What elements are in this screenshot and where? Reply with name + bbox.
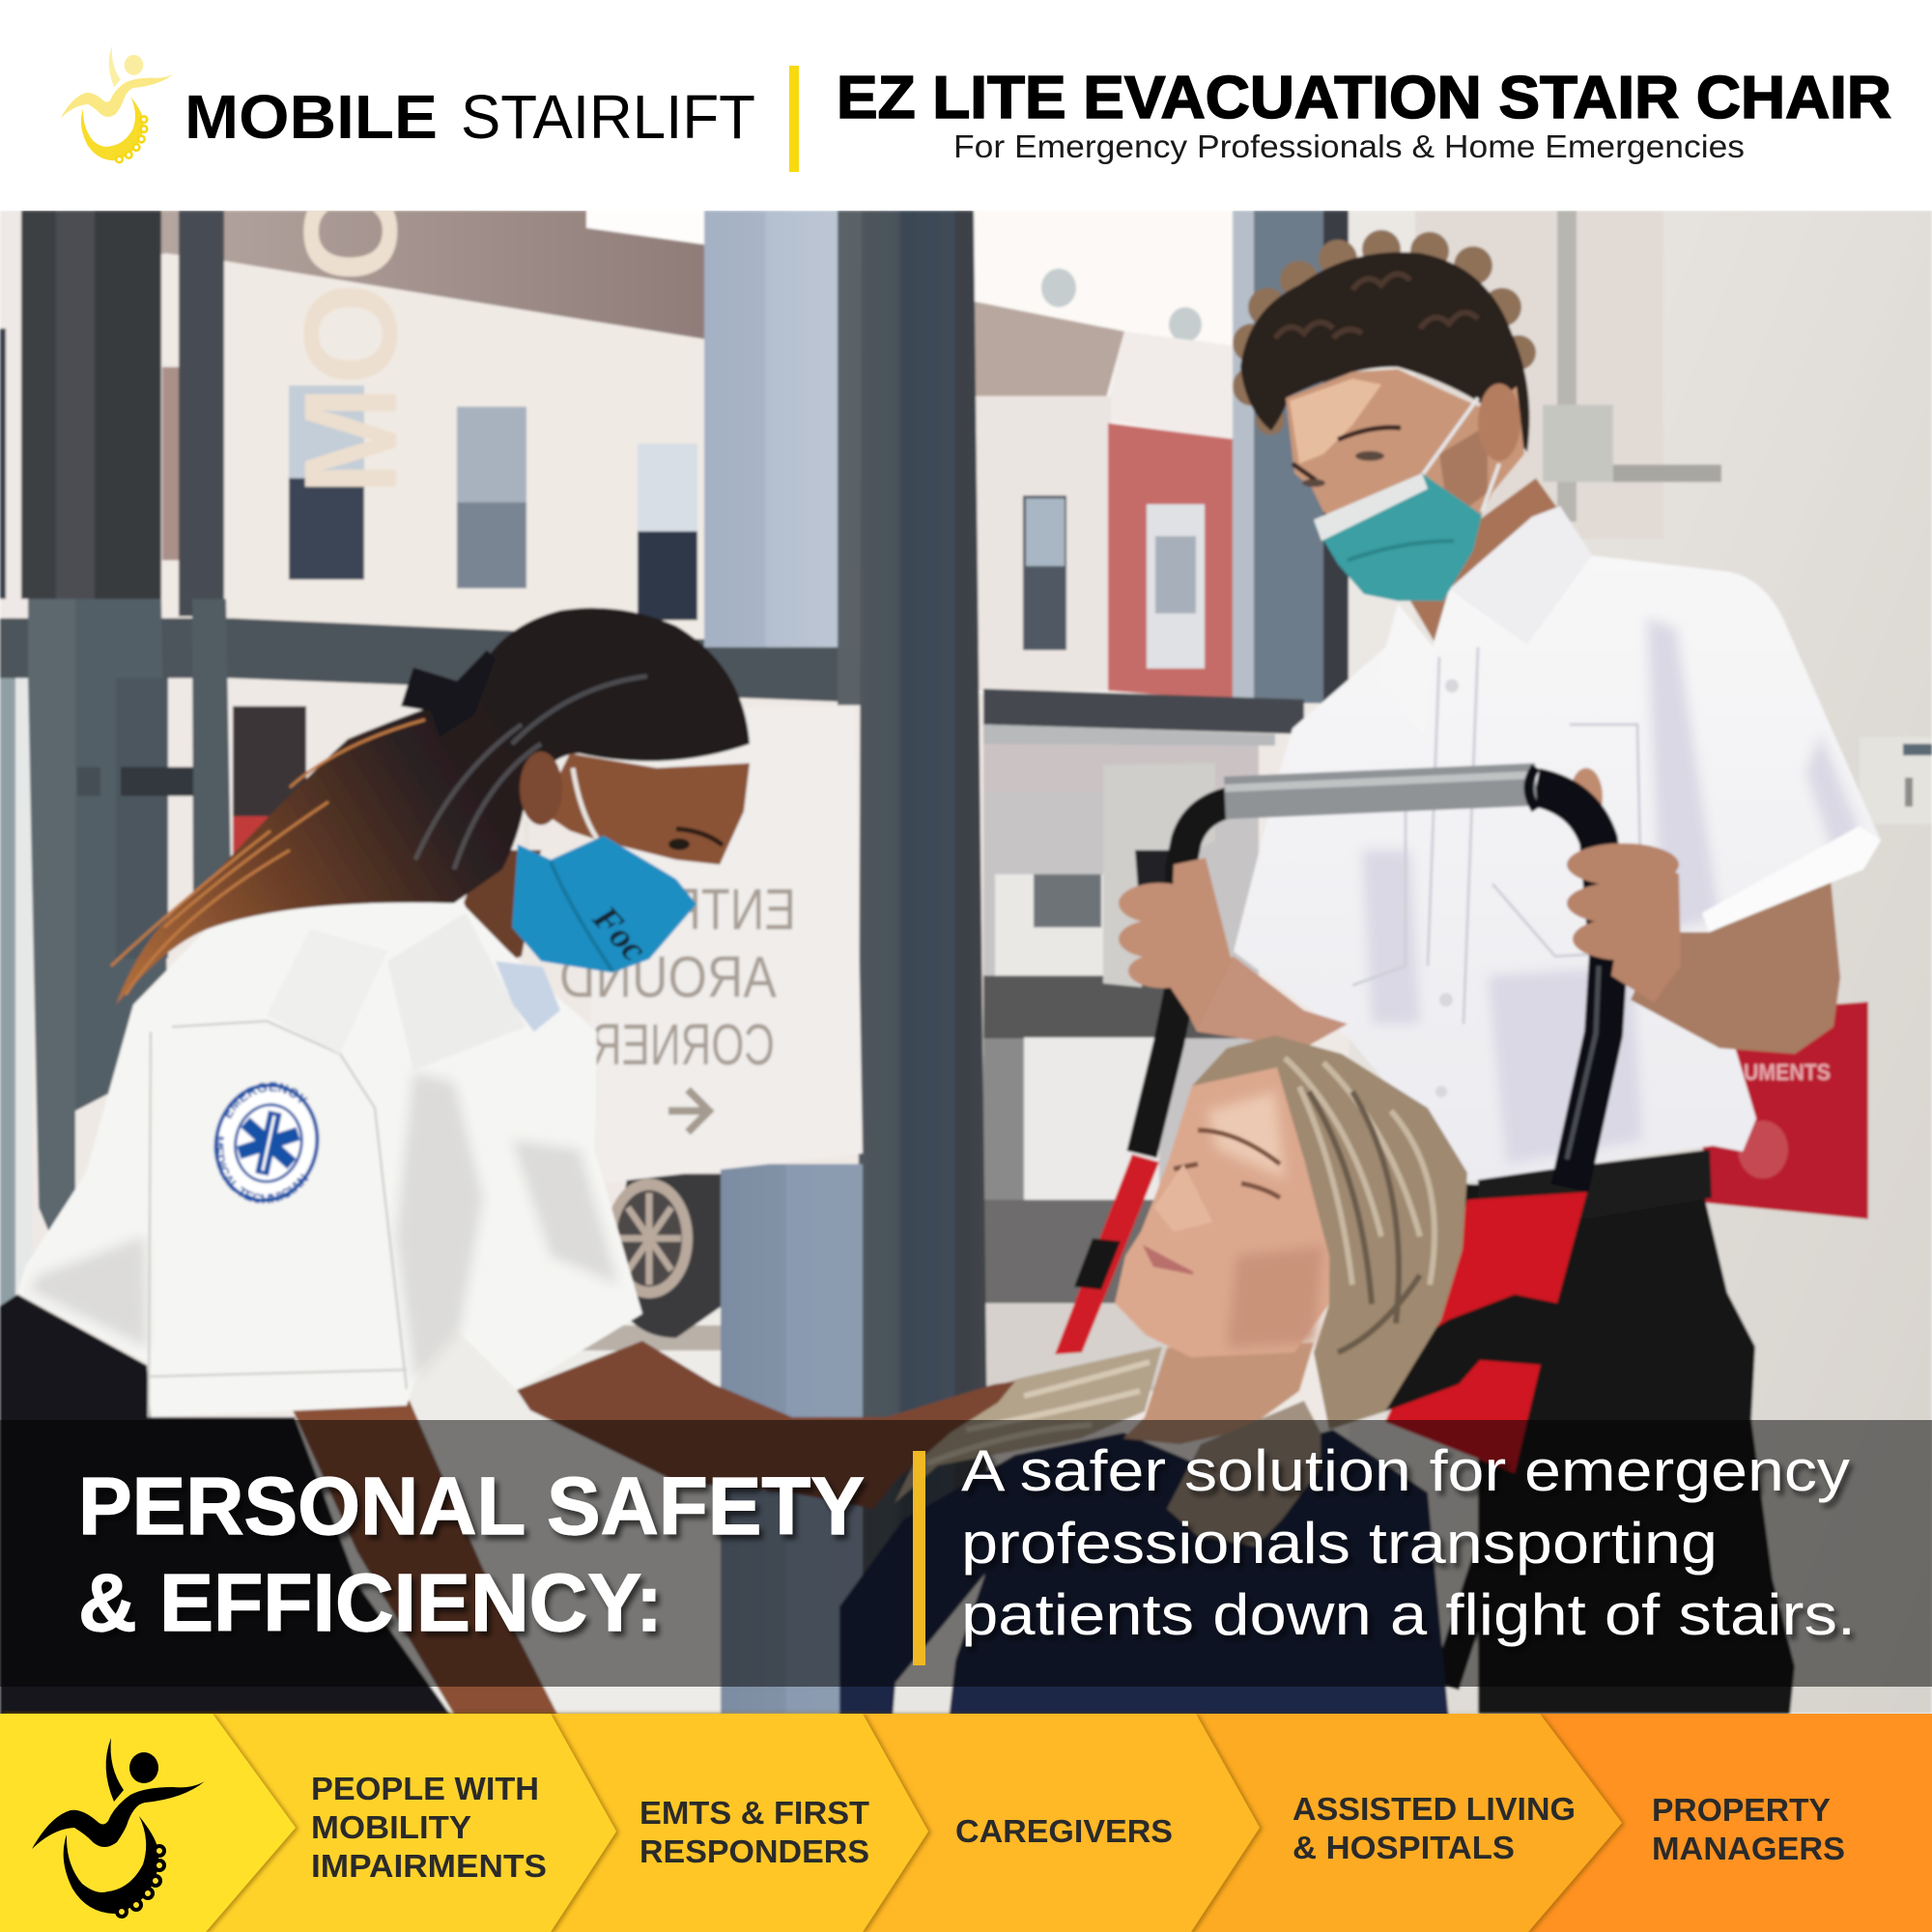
entrance sign: ENTRANCE bbox=[535, 877, 796, 942]
woman: neck bbox=[464, 850, 541, 966]
patient: lower hair bun bbox=[1167, 1401, 1321, 1547]
wall sign: red bbox=[1700, 1002, 1868, 1219]
chair: black frame bbox=[1536, 787, 1608, 1188]
audience label: people with mobility impairments: PEOPLE WITH bbox=[311, 1771, 539, 1806]
man: hands on chair bbox=[1119, 843, 1681, 1029]
title bbox=[837, 65, 1891, 164]
caption heading: PERSONAL SAFETY bbox=[78, 1461, 865, 1551]
woman: hair clip bbox=[401, 650, 496, 737]
woman: pants bbox=[0, 1294, 454, 1719]
woman: epaulet bbox=[267, 929, 387, 1054]
woman: upper arm and hand bbox=[517, 1341, 1015, 1509]
wall sign: red: UMENTS bbox=[1744, 1060, 1831, 1086]
lower right window bbox=[983, 744, 1259, 1391]
patient: long hair left bbox=[895, 1347, 1162, 1503]
woman: mask monogram: Foc bbox=[584, 897, 655, 970]
man: left forearm bbox=[1174, 956, 1348, 1048]
man bbox=[1174, 230, 1881, 1714]
EMT shoulder patch: MEDICAL TECHNICIAN bbox=[215, 1135, 309, 1206]
scene: window background and street bbox=[0, 211, 1349, 1479]
audience label: people with mobility impairments: IMPAIRMENTS bbox=[311, 1848, 547, 1884]
audience label: property managers: MANAGERS bbox=[1652, 1831, 1845, 1866]
chair: black strap bbox=[1385, 1294, 1557, 1411]
audience label: assisted living and hospitals: ASSISTED LIVING bbox=[1293, 1791, 1576, 1827]
man: hair bbox=[1233, 230, 1536, 452]
woman: collar bbox=[387, 913, 526, 1070]
chair: black stripe left bbox=[1074, 1238, 1121, 1290]
patient: navy top bbox=[839, 1430, 1449, 1719]
right window buildings bbox=[974, 211, 1235, 694]
audience chevron bar bbox=[0, 1714, 1932, 1932]
audience label: EMTs and first responders: EMTS & FIRST bbox=[639, 1795, 869, 1831]
audience label: people with mobility impairments bbox=[311, 1771, 547, 1884]
audience label: people with mobility impairments: MOBILITY bbox=[311, 1809, 471, 1845]
brand wordmark: MOBILE bbox=[185, 82, 438, 152]
woman: lower arm bbox=[293, 1401, 560, 1719]
dark caption band bbox=[0, 1420, 1932, 1687]
patient: inner shirt bbox=[893, 1574, 985, 1719]
woman bbox=[0, 607, 1015, 1717]
audience label: assisted living and hospitals bbox=[1293, 1791, 1576, 1865]
brand wordmark: STAIRLIFT bbox=[461, 82, 755, 152]
woman: shirt bbox=[17, 853, 642, 1417]
man: shirt bbox=[1234, 506, 1881, 1181]
man: sleeve hem bbox=[1702, 826, 1881, 932]
man: belt bbox=[1476, 1148, 1714, 1200]
blue column bbox=[721, 1164, 863, 1714]
evacuation chair bbox=[1055, 767, 1608, 1686]
icon: black wheelchair emblem bbox=[32, 1738, 205, 1917]
wall reflection letters: MOC bbox=[277, 186, 425, 496]
woman: hair ponytail bbox=[111, 608, 750, 1005]
patient: main hair bbox=[1192, 1036, 1467, 1430]
entrance sign: CORNER bbox=[591, 1012, 775, 1077]
audience label: property managers bbox=[1652, 1792, 1845, 1866]
caption description: patients down a flight of stairs. bbox=[961, 1582, 1856, 1647]
entrance sign: AROUND bbox=[559, 945, 777, 1009]
man: thumb behind tube bbox=[1571, 767, 1604, 807]
caption description bbox=[961, 1438, 1856, 1647]
EMT shoulder patch bbox=[213, 1080, 321, 1206]
photo scene bbox=[0, 211, 1932, 1714]
entrance sign bbox=[560, 887, 866, 1182]
audience label: assisted living and hospitals: & HOSPITALS bbox=[1293, 1830, 1515, 1865]
floor and street bbox=[582, 1323, 723, 1352]
woman: blue mask bbox=[512, 836, 696, 973]
caption accent bar bbox=[913, 1451, 925, 1665]
title: For Emergency Professionals & Home Emergencies bbox=[953, 128, 1745, 164]
woman: ear bbox=[520, 752, 562, 825]
woman: face bbox=[541, 753, 750, 865]
scene: window frames bbox=[0, 211, 1349, 1714]
scene: right wall bbox=[1349, 211, 1932, 1714]
chair: red seat panel bbox=[1385, 1192, 1587, 1473]
audience label: caregivers: CAREGIVERS bbox=[955, 1813, 1173, 1849]
chair: silver handle bbox=[1225, 784, 1536, 798]
man: pants bbox=[1449, 1162, 1795, 1714]
caption description: professionals transporting bbox=[961, 1511, 1718, 1576]
parked car wheel bbox=[606, 1174, 724, 1338]
patient: neck bbox=[1123, 1343, 1314, 1444]
logo: Mobile Stairlift yellow emblem bbox=[61, 45, 174, 162]
title: EZ LITE EVACUATION STAIR CHAIR bbox=[837, 65, 1891, 131]
caption description: A safer solution for emergency bbox=[961, 1438, 1850, 1503]
chair: lower tube bbox=[1439, 1540, 1480, 1691]
audience label: EMTs and first responders bbox=[639, 1795, 869, 1869]
caption heading: & EFFICIENCY: bbox=[78, 1557, 663, 1648]
header divider bbox=[789, 66, 799, 172]
man: right arm bbox=[1631, 879, 1840, 1054]
man: ear bbox=[1478, 384, 1520, 461]
EMT shoulder patch: EMERGENCY bbox=[224, 1080, 309, 1121]
patient bbox=[839, 1036, 1467, 1719]
header background bbox=[0, 0, 1932, 211]
caption heading bbox=[78, 1461, 865, 1648]
woman: scarf bbox=[496, 961, 560, 1032]
audience label: property managers: PROPERTY bbox=[1652, 1792, 1831, 1828]
man: neck bbox=[1409, 477, 1557, 641]
man: face bbox=[1283, 367, 1526, 516]
man: teal mask bbox=[1314, 473, 1482, 601]
patient: face bbox=[1115, 1067, 1329, 1357]
brand wordmark bbox=[185, 82, 755, 152]
audience label: EMTs and first responders: RESPONDERS bbox=[639, 1833, 869, 1869]
